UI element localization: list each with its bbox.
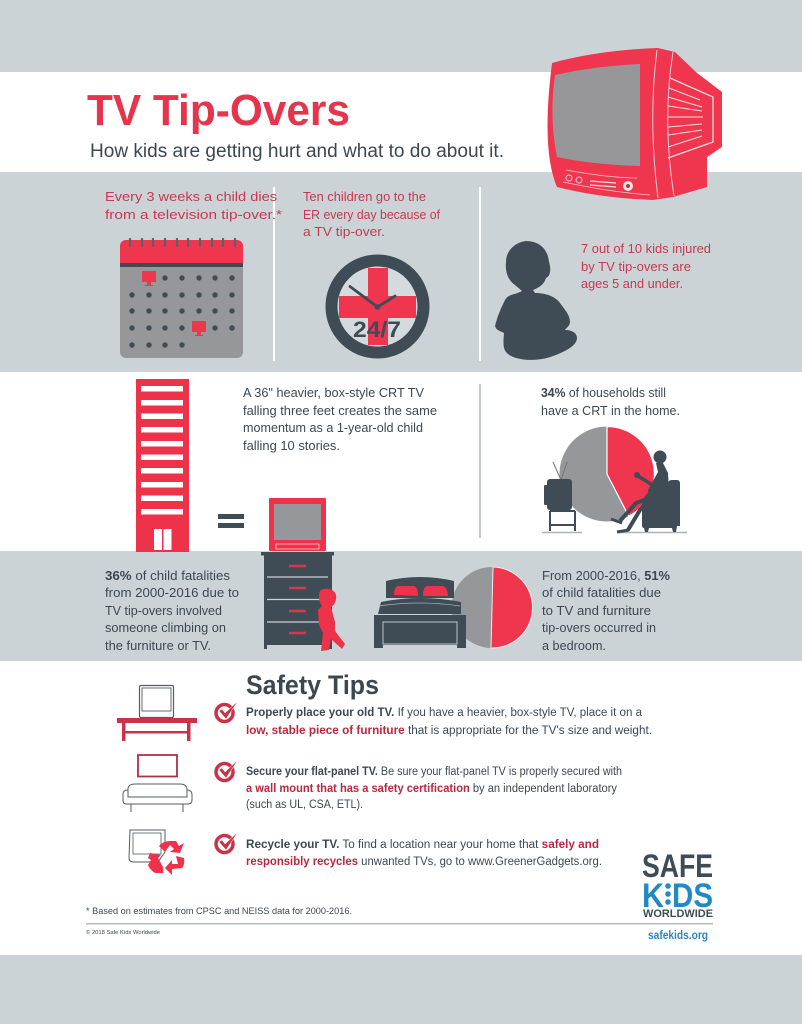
stat: child deaths bbox=[105, 189, 282, 222]
stat: ages 5 and under: ages 5 and under. bbox=[581, 276, 683, 291]
icon: flat-panel TV above sofa bbox=[123, 755, 192, 812]
stat: ER visits: ER every day because of bbox=[303, 207, 440, 222]
icon: ten-story building bbox=[136, 379, 189, 552]
stat: ER visits: a TV tip-over. bbox=[303, 224, 385, 239]
title: TV Tip-Overs bbox=[87, 86, 350, 135]
icon: calendar bbox=[120, 239, 243, 358]
stat: climbing fatalities: someone climbing on bbox=[105, 620, 226, 635]
stat: momentum comparison: falling three feet creates the same bbox=[243, 403, 437, 418]
stat: ages 5 and under: by TV tip-overs are bbox=[581, 259, 691, 274]
stat: climbing fatalities: the furniture or TV. bbox=[105, 638, 211, 653]
check icon: tip three bbox=[216, 832, 238, 852]
stat: bedroom fatalities: a bedroom. bbox=[542, 638, 606, 653]
stat: momentum comparison: momentum as a 1-year-old child bbox=[243, 420, 423, 435]
stat: climbing fatalities: from 2000-2016 due to bbox=[105, 585, 239, 600]
stat: climbing fatalities bbox=[105, 568, 239, 653]
stat: households with CRT bbox=[541, 385, 680, 418]
tip: place old TV: Properly place your old TV. If you have a heavier, box-style TV, place it on a bbox=[246, 707, 643, 719]
tip: place old TV: low, stable piece of furniture that is appropriate for the TV's size and weight. bbox=[246, 725, 652, 737]
logo: Safe Kids Worldwide: K bbox=[642, 877, 664, 915]
icon: clock with red cross bbox=[332, 260, 424, 352]
tip: place old TV bbox=[246, 707, 652, 737]
stat: child deaths: from a television tip-over.* bbox=[105, 207, 282, 222]
logo: Safe Kids Worldwide bbox=[642, 848, 713, 920]
stat: ER visits bbox=[303, 189, 440, 239]
tip: secure flat-panel TV: (such as UL, CSA, ETL). bbox=[246, 799, 363, 811]
footnote: * Based on estimates from CPSC and NEISS data for 2000-2016. bbox=[86, 906, 352, 917]
icon: TV on dresser bbox=[261, 498, 334, 649]
stat: momentum comparison: A 36" heavier, box-style CRT TV bbox=[243, 385, 424, 400]
icon: seated child silhouette bbox=[495, 241, 577, 360]
logo: Safe Kids Worldwide: WORLDWIDE bbox=[643, 908, 713, 920]
logo: Safe Kids Worldwide: DS bbox=[672, 877, 713, 915]
subtitle: How kids are getting hurt and what to do about it. bbox=[90, 141, 504, 162]
website link text: safekids.org bbox=[648, 930, 708, 942]
icon: red CRT television bbox=[548, 48, 722, 200]
stat: bedroom fatalities: to TV and furniture bbox=[542, 603, 651, 618]
stat: bedroom fatalities: tip-overs occurred in bbox=[542, 620, 656, 635]
stat: child deaths: Every 3 weeks a child dies bbox=[105, 189, 278, 204]
stat: ER visits: Ten children go to the bbox=[303, 189, 426, 204]
pie chart: CRT households with viewer bbox=[542, 426, 687, 532]
icon: clock with red cross: 24/7 bbox=[353, 317, 401, 342]
tip: recycle TV bbox=[246, 839, 602, 868]
stat: ages 5 and under: 7 out of 10 kids injured bbox=[581, 241, 711, 256]
copyright: © 2018 Safe Kids Worldwide bbox=[86, 929, 160, 936]
stat: bedroom fatalities: of child fatalities due bbox=[542, 585, 661, 600]
check icon: tip two bbox=[216, 760, 238, 780]
tip: recycle TV: responsibly recycles unwanted TVs, go to www.GreenerGadgets.org. bbox=[246, 856, 602, 868]
stat: momentum comparison bbox=[243, 385, 437, 453]
icon: equals sign bbox=[218, 514, 244, 528]
tip: secure flat-panel TV: Secure your flat-panel TV. Be sure your flat-panel TV is properly secured with bbox=[246, 766, 622, 778]
icon: red toddler bbox=[318, 589, 345, 651]
icon: TV with recycling symbol bbox=[129, 830, 184, 875]
stat: households with CRT: have a CRT in the home. bbox=[541, 403, 680, 418]
check icon: tip one bbox=[216, 701, 238, 722]
heading: safety tips: Safety Tips bbox=[246, 670, 379, 700]
pie chart: bedroom fatalities with bed bbox=[374, 567, 533, 649]
stat: bedroom fatalities: From 2000-2016, 51% bbox=[542, 568, 670, 583]
stat: climbing fatalities: TV tip-overs involved bbox=[105, 603, 222, 618]
icon: TV on low table bbox=[117, 686, 197, 741]
stat: households with CRT: 34% of households still bbox=[541, 385, 666, 400]
tip: secure flat-panel TV: a wall mount that has a safety certification by an independent laboratory bbox=[246, 783, 617, 795]
stat: bedroom fatalities bbox=[542, 568, 670, 653]
tip: recycle TV: Recycle your TV. To find a location near your home that safely and bbox=[246, 839, 599, 851]
stat: ages 5 and under bbox=[581, 241, 711, 291]
stat: climbing fatalities: 36% of child fatalities bbox=[105, 568, 231, 583]
tip: secure flat-panel TV bbox=[246, 766, 622, 811]
stat: momentum comparison: falling 10 stories. bbox=[243, 438, 340, 453]
logo: Safe Kids Worldwide: SAFE bbox=[642, 848, 713, 884]
